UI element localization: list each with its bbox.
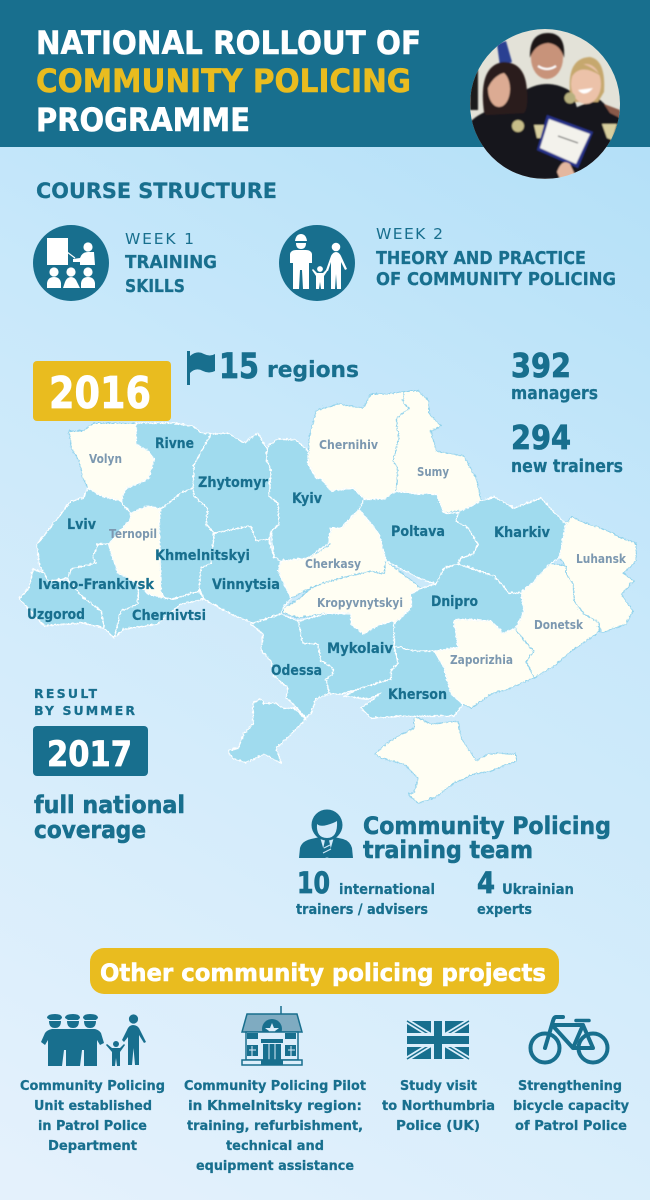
text: week 1: WEEK 1 — [125, 230, 194, 248]
text: community policing unit: in Patrol Police — [38, 1118, 147, 1134]
stat: 4 Ukrainian experts — [477, 866, 574, 918]
region: Zaporizhia — [433, 618, 533, 707]
stat: 294 new trainers: 294 — [511, 418, 571, 457]
label: Kherson: Kherson — [388, 687, 447, 703]
text: community policing pilot: in Khmelnitsky region: — [188, 1098, 362, 1114]
region: Kropyvnytskyi — [282, 560, 420, 633]
icon: UK flag — [407, 1021, 469, 1059]
label: Zhytomyr: Zhytomyr — [198, 475, 269, 491]
stat: 15 regions: 15 — [219, 347, 259, 387]
heading: training team: training team — [363, 836, 533, 864]
label: Mykolaiv: Mykolaiv — [327, 641, 393, 657]
text: community policing unit: Unit established — [34, 1098, 152, 1114]
text: bicycle capacity — [513, 1078, 629, 1134]
icon: police officers with family — [41, 1014, 146, 1066]
icon: police station building — [242, 1006, 302, 1065]
label: Kharkiv: Kharkiv — [494, 525, 550, 541]
stat: 15 regions — [219, 347, 359, 387]
label: Zaporizhia: Zaporizhia — [450, 652, 513, 667]
region: Kyiv — [265, 438, 363, 560]
heading: course structure: COURSE STRUCTURE — [36, 179, 277, 204]
label: Rivne: Rivne — [155, 436, 194, 452]
region: Cherkasy — [277, 508, 385, 597]
title: PROGRAMME — [36, 101, 250, 139]
region: Kharkiv — [455, 496, 565, 592]
stat: 392 managers: 392 — [511, 346, 571, 385]
region: Lviv — [36, 487, 130, 580]
label: Ivano-Frankivsk: Ivano-Frankivsk — [38, 577, 154, 593]
text: result by summer — [34, 686, 135, 718]
icon: bicycle — [530, 1017, 608, 1062]
stat: 4 Ukrainian experts: experts — [477, 902, 532, 918]
heading: training team — [363, 812, 611, 864]
region: Zhytomyr — [192, 432, 278, 540]
text: week 2: OF COMMUNITY POLICING — [376, 270, 616, 290]
icon: trainer and audience — [33, 225, 109, 301]
text: full national coverage: full national — [34, 791, 185, 819]
photo: officers with certificate — [470, 29, 620, 179]
text: week 2: WEEK 2 — [376, 225, 443, 243]
stat: 10 international trainers: international — [339, 882, 435, 898]
region: Kherson — [343, 645, 462, 717]
text: week 1: TRAINING — [125, 253, 217, 273]
region: Odessa south — [227, 698, 305, 762]
region: Dnipro — [393, 563, 523, 650]
stat: 10 international trainers: trainers / advisers — [296, 902, 428, 918]
label: Chernihiv: Chernihiv — [319, 437, 378, 452]
stat: 392 managers — [511, 346, 598, 404]
text: community policing pilot: technical and — [226, 1138, 324, 1154]
label: Kropyvnytskyi: Kropyvnytskyi — [317, 595, 403, 610]
badge: 2016: 2016 — [49, 368, 151, 419]
map of Ukraine regions — [18, 390, 635, 802]
label: Khmelnitskyi: Khmelnitskyi — [155, 548, 250, 564]
label: Lviv: Lviv — [67, 517, 96, 533]
icon: police officer with family — [279, 225, 355, 301]
map labels — [27, 436, 627, 703]
text: result by summer: BY SUMMER — [34, 703, 135, 718]
region: Vinnytsia — [198, 525, 290, 622]
text: week 1 — [125, 230, 217, 297]
text: community policing pilot: training, refurbishment, — [187, 1118, 363, 1134]
label: Uzgorod: Uzgorod — [27, 607, 85, 623]
icon: flag — [187, 351, 215, 385]
text: bicycle capacity: of Patrol Police — [515, 1118, 627, 1134]
heading: training team: Community Policing — [363, 812, 611, 840]
region: Donetsk — [515, 562, 598, 677]
label: Poltava: Poltava — [391, 524, 445, 540]
text: community policing unit: Department — [48, 1138, 138, 1154]
region: Mykolaiv — [297, 612, 397, 693]
text: week 2 — [376, 225, 616, 290]
badge: 2017 — [33, 726, 148, 776]
stat: 15 regions: regions — [267, 358, 359, 383]
stat: 4 Ukrainian experts: Ukrainian — [502, 882, 574, 898]
label: Volyn: Volyn — [89, 451, 122, 466]
region: Rivne — [120, 422, 210, 512]
label: Odessa: Odessa — [271, 663, 322, 679]
region: Ternopil — [107, 505, 163, 597]
stat: 10 international trainers — [296, 866, 435, 918]
title: NATIONAL ROLLOUT OF — [36, 24, 421, 62]
banner: other projects: Other community policing projects — [100, 959, 546, 987]
text: result by summer: RESULT — [34, 686, 97, 701]
header band — [0, 0, 650, 147]
badge: 2017: 2017 — [47, 735, 132, 775]
region: Poltava — [358, 490, 477, 583]
text: community policing unit — [20, 1078, 165, 1154]
label: Vinnytsia: Vinnytsia — [212, 577, 280, 593]
text: study visit: Study visit — [400, 1078, 478, 1094]
region: Sumy — [392, 390, 480, 512]
region: Volyn — [68, 422, 153, 500]
text: study visit: Police (UK) — [396, 1118, 480, 1134]
text: bicycle capacity: Strengthening — [518, 1078, 622, 1094]
text: community policing unit: Community Policing — [20, 1078, 165, 1094]
region: Crimea — [373, 715, 515, 802]
stat: 10 international trainers: 10 — [297, 866, 330, 900]
text: week 1: SKILLS — [125, 277, 185, 297]
label: Kyiv: Kyiv — [292, 491, 322, 507]
stat: 294 new trainers — [511, 418, 623, 477]
label: Sumy: Sumy — [417, 464, 449, 479]
label: Ternopil: Ternopil — [109, 526, 157, 541]
region: Uzgorod — [18, 568, 103, 627]
text: community policing pilot: Community Policing Pilot — [184, 1078, 367, 1094]
text: study visit — [382, 1078, 495, 1134]
stat: 4 Ukrainian experts: 4 — [477, 866, 495, 900]
label: Dnipro: Dnipro — [431, 594, 478, 610]
region: Luhansk — [558, 516, 635, 632]
region: Odessa north — [250, 613, 332, 717]
text: community policing pilot — [184, 1078, 367, 1174]
region: Ivano-Frankivsk — [67, 543, 137, 637]
stat: 392 managers: managers — [511, 384, 598, 404]
text: full national coverage: coverage — [34, 816, 146, 844]
banner: other projects — [90, 948, 559, 994]
stat: 294 new trainers: new trainers — [511, 457, 623, 477]
text: community policing pilot: equipment assistance — [196, 1158, 354, 1174]
label: Chernivtsi: Chernivtsi — [132, 608, 206, 624]
text: bicycle capacity: bicycle capacity — [513, 1098, 629, 1114]
text: study visit: to Northumbria — [382, 1098, 495, 1114]
text: week 2: THEORY AND PRACTICE — [376, 249, 586, 269]
title — [36, 24, 421, 139]
region: Chernivtsi — [113, 583, 203, 637]
title: COMMUNITY POLICING — [36, 62, 411, 100]
icon: trainer in tie — [299, 810, 353, 858]
label: Cherkasy: Cherkasy — [305, 556, 361, 571]
label: Luhansk: Luhansk — [576, 551, 627, 566]
region: Chernihiv — [307, 390, 408, 498]
label: Donetsk: Donetsk — [534, 617, 584, 632]
text: full national coverage — [34, 791, 185, 844]
region: Khmelnitskyi — [158, 487, 213, 598]
